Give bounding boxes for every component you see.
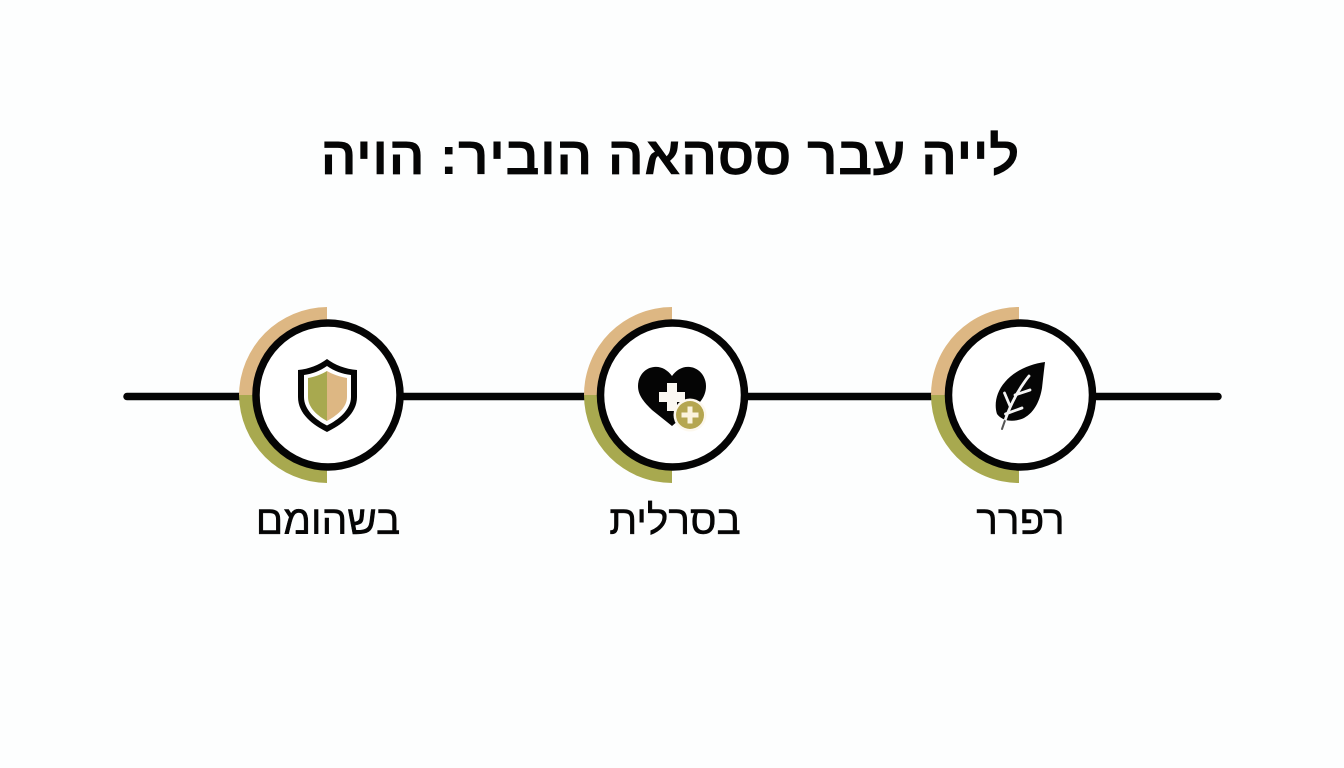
label: shield step: בשהומם xyxy=(256,497,400,543)
icon: leaf xyxy=(996,362,1045,429)
label: heart step: בסרלית xyxy=(609,497,741,543)
ring xyxy=(600,323,744,467)
label: leaf step: רפרר xyxy=(976,497,1065,543)
step: shield xyxy=(239,307,400,483)
title: לייה עבר ססהאה הוביר: הויה xyxy=(320,126,1020,186)
half-ring accent: tan and olive xyxy=(931,307,1019,483)
ring xyxy=(948,323,1092,467)
ring xyxy=(256,323,400,467)
step: leaf xyxy=(931,307,1092,483)
icon: shield xyxy=(298,359,357,432)
half-ring accent: tan and olive xyxy=(584,307,672,483)
icon: heart with plus xyxy=(638,367,706,432)
timeline line xyxy=(127,393,1218,400)
half-ring accent: tan and olive xyxy=(239,307,327,483)
step: heart xyxy=(584,307,744,483)
